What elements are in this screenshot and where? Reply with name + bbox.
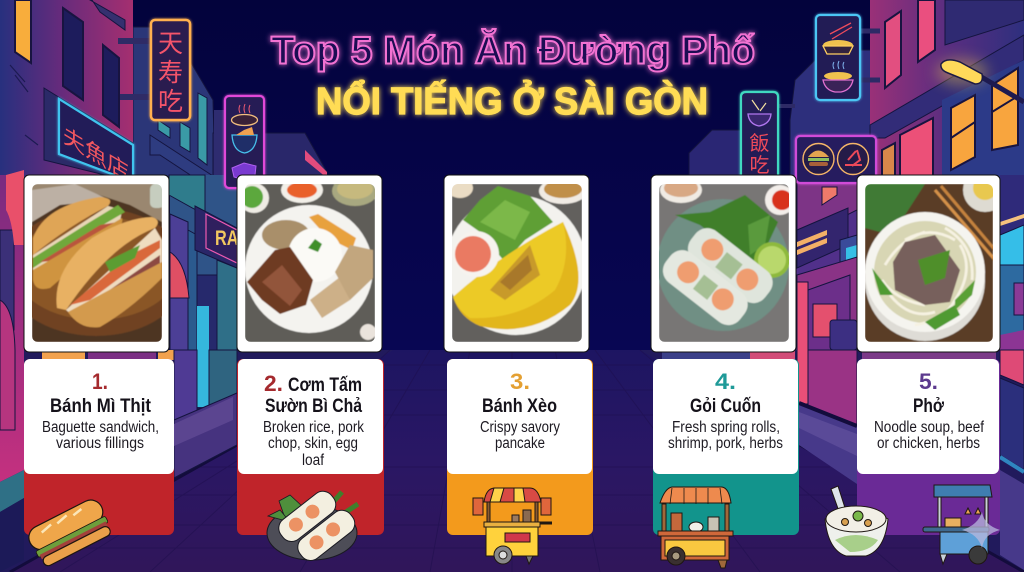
info card 5: or chicken, herbs: [877, 435, 980, 452]
info card 1: Bánh Mì Thịt: [50, 396, 152, 417]
neon sign: burger and rice circles: [796, 136, 876, 183]
neon sign: blue shop sign: 魚: [85, 136, 107, 174]
info card 1: various fillings: [56, 435, 144, 452]
info card 3: Crispy savory: [480, 419, 560, 436]
icon: baguette sandwich: [25, 496, 115, 569]
neon sign: teal bowl and characters: 吃: [750, 154, 770, 177]
neon sign: red characters orange frame: [151, 20, 190, 120]
info card 2: Cơm Tấm: [288, 375, 362, 396]
info card 2: Sườn Bì Chả: [265, 396, 362, 417]
info card 4: 4.: [715, 369, 736, 394]
info card 2: loaf: [302, 452, 325, 469]
info card 3: pancake: [495, 435, 545, 452]
neon sign: blue shop sign: 夫: [63, 122, 85, 161]
info card 5: Noodle soup, beef: [874, 419, 985, 436]
neon sign: red characters orange frame: 吃: [158, 88, 183, 116]
title: [271, 28, 755, 123]
left buildings: [0, 0, 327, 572]
card 2: Cơm Tấm Sườn Bì Chả: [237, 175, 384, 565]
info card 2: 2.: [264, 371, 283, 396]
photo frame 3: [444, 175, 589, 352]
info card 5: Phở: [913, 396, 944, 417]
street lamp: [936, 58, 1024, 102]
icon: blue food cart: [923, 485, 992, 564]
card 5: Phở: [825, 168, 1007, 564]
neon sign: noodle bowls: [816, 15, 860, 100]
photo frame 5: [857, 168, 1007, 352]
right buildings: [662, 0, 1024, 570]
icon: spring rolls on plate: [267, 487, 359, 565]
title line 2: NỔI TIẾNG Ở SÀI GÒN: [316, 78, 708, 123]
icon: orange awning cart: [658, 487, 733, 568]
info card 5: 5.: [919, 369, 938, 394]
title line 1: Top 5 Món Ăn Đường Phố: [271, 28, 755, 72]
neon sign: teal bowl and characters: 飯: [750, 132, 770, 155]
info card 3: Bánh Xèo: [482, 396, 557, 417]
photo frame 2: [237, 175, 382, 352]
neon sign: blue shop sign: 店: [107, 149, 129, 187]
neon sign: building RAI: RAI: [215, 227, 243, 250]
street floor: [0, 350, 1024, 572]
photo frame 4: [651, 175, 796, 352]
info card 4: shrimp, pork, herbs: [668, 435, 783, 452]
neon sign: building RAI: [195, 206, 243, 268]
info card 5: [857, 359, 1000, 535]
info card 3: [447, 359, 593, 535]
card 3: Bánh Xèo: [444, 175, 593, 564]
info card 4: Gỏi Cuốn: [690, 396, 761, 417]
info card 2: [237, 359, 384, 535]
info card 1: Baguette sandwich,: [42, 419, 159, 436]
card 4: Gỏi Cuốn: [651, 175, 799, 568]
photo frame 1: [24, 174, 170, 352]
info card 1: [24, 359, 174, 535]
info card 4: [653, 359, 799, 535]
icon: soup bowl with spoon: [825, 486, 888, 556]
info card 4: Fresh spring rolls,: [672, 419, 780, 436]
info card 2: Broken rice, pork: [263, 419, 364, 436]
info card 2: chop, skin, egg: [268, 435, 358, 452]
neon sign: blue shop sign: [44, 88, 133, 187]
info card 1: 1.: [92, 369, 108, 394]
neon sign: red characters orange frame: 寿: [158, 59, 183, 87]
neon sign: red characters orange frame: 天: [158, 30, 183, 58]
icon: yellow food cart: [473, 488, 552, 564]
neon sign: teal bowl and characters: [741, 92, 778, 178]
sparkle watermark: [962, 512, 1000, 548]
card 1: Bánh Mì Thịt: [24, 174, 174, 566]
info card 3: 3.: [510, 369, 530, 394]
neon sign: pink food icons: [225, 96, 264, 188]
